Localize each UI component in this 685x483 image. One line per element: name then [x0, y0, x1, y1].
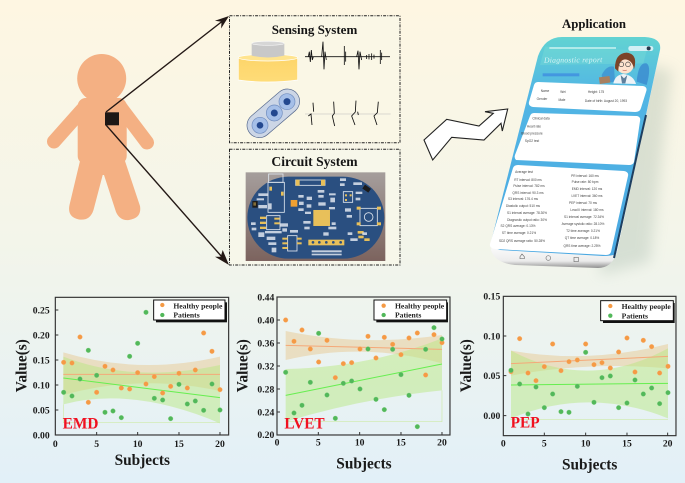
- card: summary: [515, 113, 640, 165]
- card: measurement table: T2 time average: 0.21%: [566, 229, 600, 233]
- card: summary: Blood pressure: [521, 132, 543, 136]
- app header: title and doctor: [540, 46, 653, 85]
- chart: PEP: [458, 292, 676, 473]
- x axis ticks: 15: [396, 438, 406, 449]
- card: patient info: Male: [559, 98, 566, 102]
- card: measurement table: QRS time average: 2.25%: [563, 244, 601, 248]
- card: measurement table: [490, 165, 628, 255]
- scatter: patients: [509, 350, 670, 416]
- legend: [374, 300, 448, 322]
- scatter: healthy people: [283, 318, 444, 380]
- y axis ticks: 0.10: [483, 331, 500, 342]
- legend: [601, 301, 675, 323]
- y axis ticks: 0.25: [33, 305, 50, 316]
- y axis ticks: [483, 292, 500, 422]
- card: measurement table: Diagnostic output ratio: 30%: [507, 218, 547, 222]
- y axis ticks: 0.24: [257, 407, 274, 418]
- metric tag: LVET: [284, 415, 325, 432]
- y axis ticks: 0.05: [33, 405, 50, 416]
- fit lines: [63, 374, 220, 398]
- icon: electrode strip: [252, 94, 295, 133]
- legend: Patients: [395, 311, 421, 320]
- x axis ticks: 10: [581, 439, 591, 450]
- card: measurement table: S2 QRS average: 0.13%: [501, 224, 536, 228]
- x axis label: Subjects: [562, 456, 617, 473]
- y axis ticks: 0.40: [257, 315, 274, 326]
- fit lines: [511, 356, 668, 385]
- scatter: healthy people: [509, 336, 670, 383]
- chart: EMD: [14, 297, 229, 469]
- x axis ticks: 20: [437, 438, 447, 449]
- arrow to sensing system: [106, 16, 229, 112]
- y axis ticks: [33, 305, 50, 441]
- x axis ticks: 5: [94, 439, 99, 450]
- card: measurement table: ST time average: 0.21%: [502, 231, 536, 235]
- x axis ticks: 0: [501, 439, 506, 450]
- card: summary: SpO2 test: [525, 139, 539, 143]
- y axis ticks: 0.44: [257, 292, 274, 303]
- metric tag: PEP: [511, 415, 540, 432]
- y axis ticks: [257, 292, 274, 441]
- sensor patch on chest: [105, 112, 119, 125]
- card: patient info: [529, 82, 647, 112]
- card: patient info: Gender: [537, 97, 548, 101]
- panel: sensing system: [230, 16, 400, 143]
- x axis ticks: 15: [622, 439, 632, 450]
- card: measurement table: Average systolic ratio: 28.10%: [562, 222, 605, 226]
- y axis ticks: 0.00: [483, 411, 500, 422]
- x axis ticks: 0: [53, 439, 58, 450]
- x axis ticks: 20: [663, 439, 673, 450]
- card: measurement table: QT time average: 0.18%: [565, 236, 599, 240]
- x axis ticks: 0: [275, 438, 280, 449]
- photo: circuit board: [246, 172, 385, 261]
- x axis ticks: 15: [174, 439, 184, 450]
- arrow: zigzag to application: [424, 109, 508, 160]
- confidence bands: [511, 344, 668, 420]
- y axis ticks: 0.36: [257, 338, 274, 349]
- card: measurement table: Diastolic output: 510 ms: [506, 204, 540, 208]
- y axis label: Value(s): [14, 339, 31, 392]
- card: measurement table: PR interval: 160 ms: [571, 174, 599, 178]
- x axis ticks: [275, 438, 447, 449]
- card: summary: Heart rate: [527, 124, 541, 128]
- legend: Healthy people: [622, 302, 671, 311]
- x axis ticks: [53, 439, 225, 450]
- card: measurement table: Average test: [515, 170, 533, 174]
- card: measurement table: SD2 QRS average ratio: 50.28%: [499, 239, 545, 243]
- confidence bands: [286, 331, 442, 422]
- x axis label: Subjects: [336, 456, 392, 473]
- axes frame: [277, 297, 450, 435]
- card: summary: Clinical data: [532, 116, 550, 120]
- phone dark edge: [614, 115, 646, 258]
- arrow to circuit system: [106, 125, 229, 265]
- x axis ticks: 5: [316, 438, 321, 449]
- scatter: patients: [283, 325, 444, 429]
- x axis label: Subjects: [115, 452, 170, 469]
- card: measurement table: Pulse interval: 782 ms: [513, 184, 545, 188]
- legend: Healthy people: [395, 301, 445, 310]
- card: measurement table: S3 interval: 176.4 ms: [508, 197, 538, 201]
- y axis ticks: 0.20: [33, 330, 50, 341]
- panel: circuit system: [230, 149, 400, 265]
- scatter: healthy people: [61, 331, 222, 405]
- icon: pressure sensor: [238, 41, 298, 82]
- phone navigation buttons: [520, 254, 578, 262]
- legend: Healthy people: [173, 301, 223, 310]
- waveform: ECG signal: [305, 101, 391, 126]
- card: measurement table: EMD interval: 120 ms: [572, 187, 603, 191]
- app header: title and doctor: Diagnostic report: [543, 55, 603, 65]
- card: patient info: Name: [541, 89, 549, 93]
- fit lines: [286, 345, 442, 395]
- waveform: mechanical signal: [305, 42, 390, 69]
- heading: circuit system: Circuit System: [271, 154, 358, 169]
- legend: Patients: [173, 311, 200, 320]
- card: patient info: Wei: [560, 90, 566, 94]
- axes frame: [55, 297, 229, 435]
- card: measurement table: Pulse rate: 80 bpm: [572, 180, 599, 184]
- x axis ticks: 10: [355, 438, 365, 449]
- card: patient info: Date of birth: August 20, 1993: [585, 99, 627, 103]
- y axis ticks: 0.05: [483, 371, 500, 382]
- scatter: patients: [61, 310, 222, 421]
- phone: diagnostic report app: [490, 37, 660, 268]
- phone shadow: [600, 60, 672, 275]
- y axis ticks: 0.28: [257, 384, 274, 395]
- y axis label: Value(s): [458, 339, 475, 392]
- legend: Patients: [622, 311, 648, 320]
- heading: application: Application: [562, 17, 626, 31]
- heading: sensing system: Sensing System: [272, 22, 357, 37]
- x axis ticks: [501, 439, 673, 450]
- x axis ticks: 5: [542, 439, 547, 450]
- y axis ticks: 0.32: [257, 361, 274, 372]
- y axis label: Value(s): [234, 339, 251, 392]
- card: measurement table: PEP interval: 70 ms: [569, 201, 597, 205]
- confidence bands: [63, 352, 220, 423]
- y axis ticks: 0.15: [483, 292, 500, 303]
- card: measurement table: Lead II interval: 180 ms: [570, 208, 604, 212]
- y axis ticks: 0.10: [33, 380, 50, 391]
- human figure: [54, 54, 147, 220]
- card: measurement table: LVET interval: 360 ms: [571, 194, 603, 198]
- card: measurement table: QRS interval: 90.3 ms: [512, 191, 544, 195]
- y axis ticks: 0.00: [33, 430, 50, 441]
- metric tag: EMD: [63, 415, 98, 432]
- card: measurement table: S1 interval average: 72.34%: [564, 215, 604, 219]
- x axis ticks: 10: [133, 439, 143, 450]
- legend: [154, 300, 227, 322]
- chart: LVET: [234, 292, 450, 473]
- card: measurement table: RT interval: 800 ms: [514, 178, 542, 182]
- card: patient info: Height: 175: [588, 90, 604, 94]
- axes frame: [503, 296, 676, 436]
- x axis ticks: 20: [215, 439, 225, 450]
- card: measurement table: S1 interval average: 78.30%: [507, 211, 547, 215]
- y axis ticks: 0.15: [33, 355, 50, 366]
- y axis ticks: 0.20: [257, 430, 274, 441]
